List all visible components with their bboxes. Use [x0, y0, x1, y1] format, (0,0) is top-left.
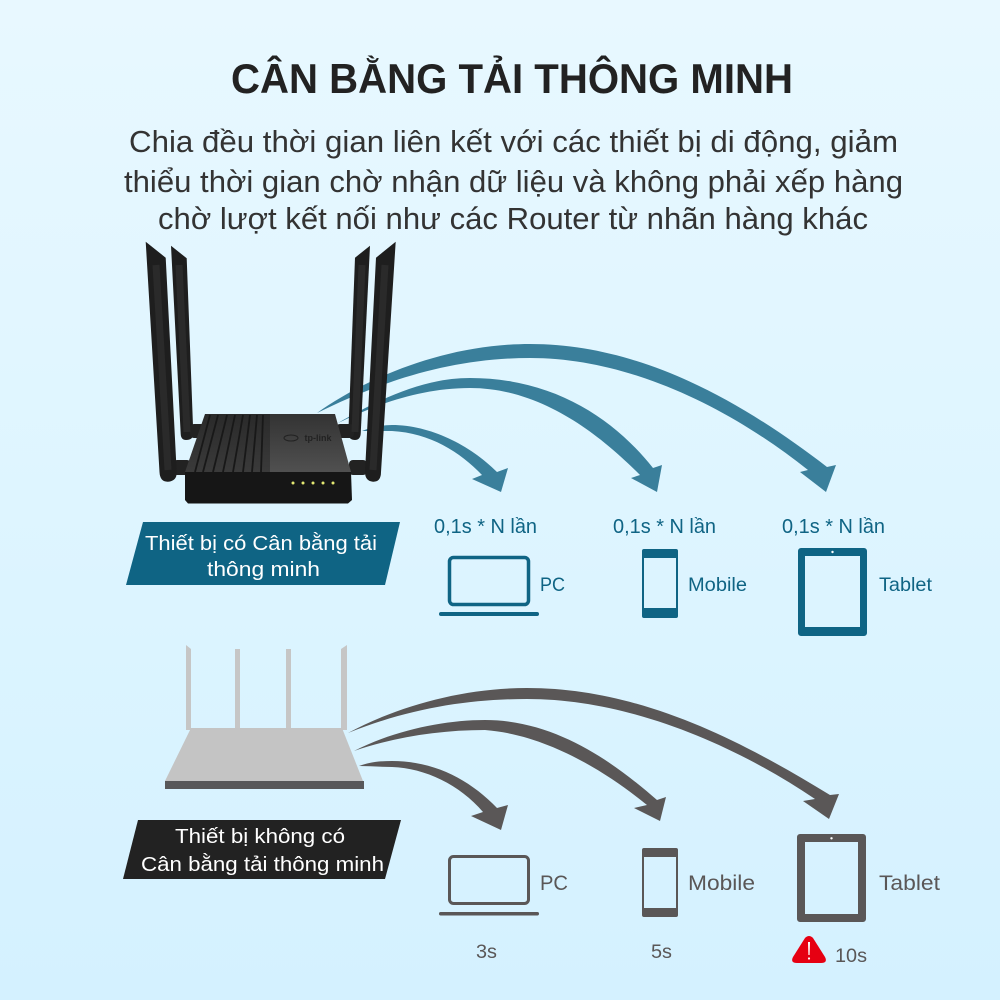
time: tablet: 10s [835, 946, 867, 967]
label: with smart load balancing: thông minh [207, 558, 320, 581]
label: with smart load balancing [126, 522, 400, 585]
icon: teal phone [642, 549, 678, 618]
Tablet label: Tablet [879, 872, 940, 895]
logo [284, 433, 332, 443]
PC label: PC [540, 872, 568, 895]
Mobile label: Mobile [688, 574, 747, 596]
label: without smart load balancing [123, 820, 401, 879]
icon: grey laptop [439, 856, 539, 916]
icon: grey tablet [797, 834, 866, 922]
arrow to tablet [348, 688, 839, 819]
subtitle text block: Chia đều thời gian liên kết với các thiết bị di động, giảm [129, 124, 898, 159]
router top left ribbed [185, 414, 270, 472]
grey generic router [165, 645, 364, 789]
title: CÂN BẰNG TẢI THÔNG MINH [231, 55, 793, 102]
router top right panel [270, 414, 351, 472]
icon: warning triangle [792, 936, 826, 963]
label: with smart load balancing: Thiết bị có Cân bằng tải [145, 532, 377, 555]
rear antennas [171, 246, 370, 440]
time: PC: 3s [476, 942, 497, 963]
timing labels: 0,1s * N lần [782, 516, 885, 538]
antenna highlights [156, 265, 385, 470]
label: without smart load balancing: Thiết bị không có [175, 825, 345, 848]
front antennas [146, 242, 396, 482]
ribs [195, 415, 263, 472]
body [165, 728, 363, 781]
icon: grey phone [642, 848, 678, 917]
arrows: smart load balancing [317, 344, 836, 492]
arrow to PC [362, 425, 508, 492]
logo: tp-link [304, 433, 332, 443]
arrow to PC [359, 761, 508, 830]
icon: teal laptop [439, 558, 539, 616]
arrow to tablet [317, 344, 836, 492]
time: mobile: 5s [651, 942, 672, 963]
black router with four antennas [146, 242, 396, 503]
base [165, 781, 364, 789]
Tablet label: Tablet [879, 574, 933, 596]
label: without smart load balancing: Cân bằng tải thông minh [141, 853, 384, 876]
arrow to mobile [354, 720, 666, 821]
arrow to mobile [338, 378, 662, 492]
subtitle text block: chờ lượt kết nối như các Router từ nhãn hàng khác [158, 201, 868, 236]
timing labels: 0,1s * N lần [613, 516, 716, 538]
antennas [186, 645, 347, 730]
antenna hinges [173, 424, 367, 475]
subtitle text block [124, 124, 903, 236]
status LEDs [292, 482, 334, 484]
icon: teal tablet [798, 548, 867, 636]
subtitle text block: thiểu thời gian chờ nhận dữ liệu và không phải xếp hàng [124, 164, 903, 199]
router front face [185, 472, 352, 504]
timing labels [434, 516, 885, 538]
timing labels: 0,1s * N lần [434, 516, 537, 538]
arrows: no load balancing [348, 688, 839, 830]
PC label: PC [540, 574, 565, 596]
Mobile label: Mobile [688, 872, 755, 895]
